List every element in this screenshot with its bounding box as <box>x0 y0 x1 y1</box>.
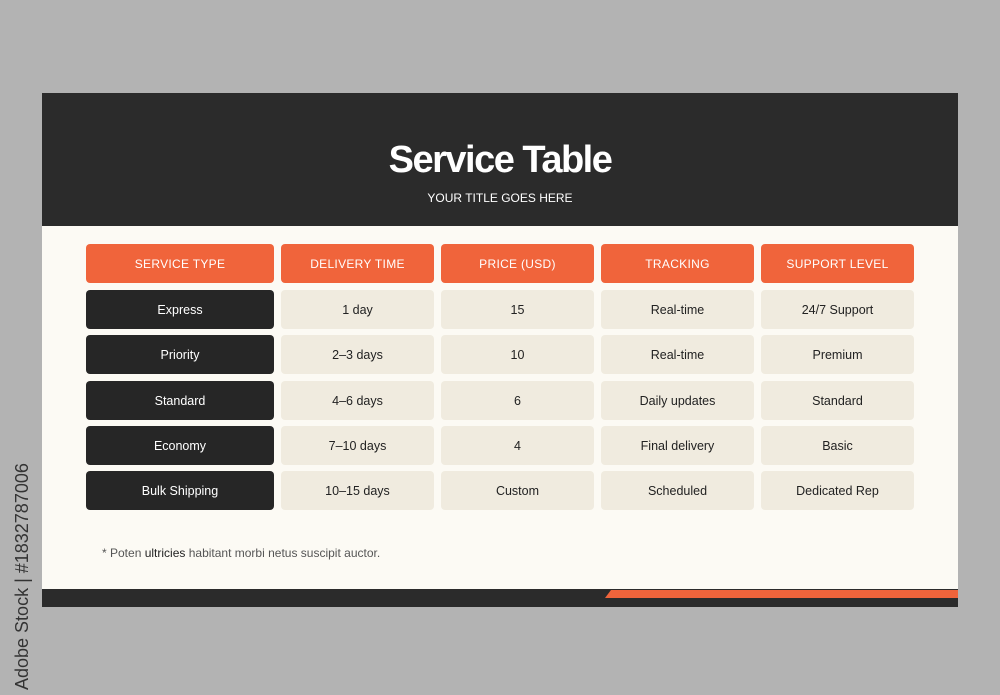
subtitle: YOUR TITLE GOES HERE <box>427 191 573 205</box>
row: bulk: Scheduled <box>648 484 707 498</box>
table <box>86 244 914 510</box>
row: standard: Standard <box>155 394 205 408</box>
row: bulk: Custom <box>496 484 539 498</box>
row: priority: Priority <box>161 348 199 362</box>
row: standard <box>86 381 914 420</box>
row: bulk <box>86 471 914 510</box>
header row: SUPPORT LEVEL <box>786 256 889 270</box>
row: priority: 10 <box>511 348 524 362</box>
row: express: Real-time <box>651 302 704 316</box>
row: economy <box>86 426 914 465</box>
row: express: 15 <box>511 302 524 316</box>
side watermark id: Adobe Stock | #1832787006 <box>12 463 32 690</box>
row: bulk: Bulk Shipping <box>142 484 218 498</box>
bottom bar <box>42 589 958 607</box>
header row <box>86 244 914 283</box>
row: economy: 7–10 days <box>329 438 386 452</box>
row: priority: Premium <box>812 348 862 362</box>
row: economy: Economy <box>154 438 206 452</box>
row: standard: Daily updates <box>640 394 715 408</box>
footnote: * Poten ultricies habitant morbi netus suscipit auctor. <box>102 546 380 560</box>
row: bulk: 10–15 days <box>325 484 390 498</box>
row: economy: 4 <box>514 438 521 452</box>
row: standard: Standard <box>812 394 863 408</box>
header row: DELIVERY TIME <box>310 256 405 270</box>
row: express <box>86 290 914 329</box>
row: express: 1 day <box>342 302 373 316</box>
row: express: Express <box>157 302 203 316</box>
row: priority <box>86 335 914 374</box>
row: priority: Real-time <box>651 348 704 362</box>
header row: PRICE (USD) <box>479 256 556 270</box>
title: Service Table <box>389 139 611 181</box>
row: standard: 6 <box>514 394 521 408</box>
row: express: 24/7 Support <box>802 302 873 316</box>
header band <box>42 93 958 226</box>
header row: SERVICE TYPE <box>135 256 225 270</box>
row: priority: 2–3 days <box>332 348 383 362</box>
row: bulk: Dedicated Rep <box>796 484 879 498</box>
orange stripe <box>605 590 958 598</box>
card <box>42 93 958 607</box>
row: standard: 4–6 days <box>332 394 383 408</box>
header row: TRACKING <box>645 256 710 270</box>
row: economy: Final delivery <box>641 438 714 452</box>
row: economy: Basic <box>822 438 853 452</box>
